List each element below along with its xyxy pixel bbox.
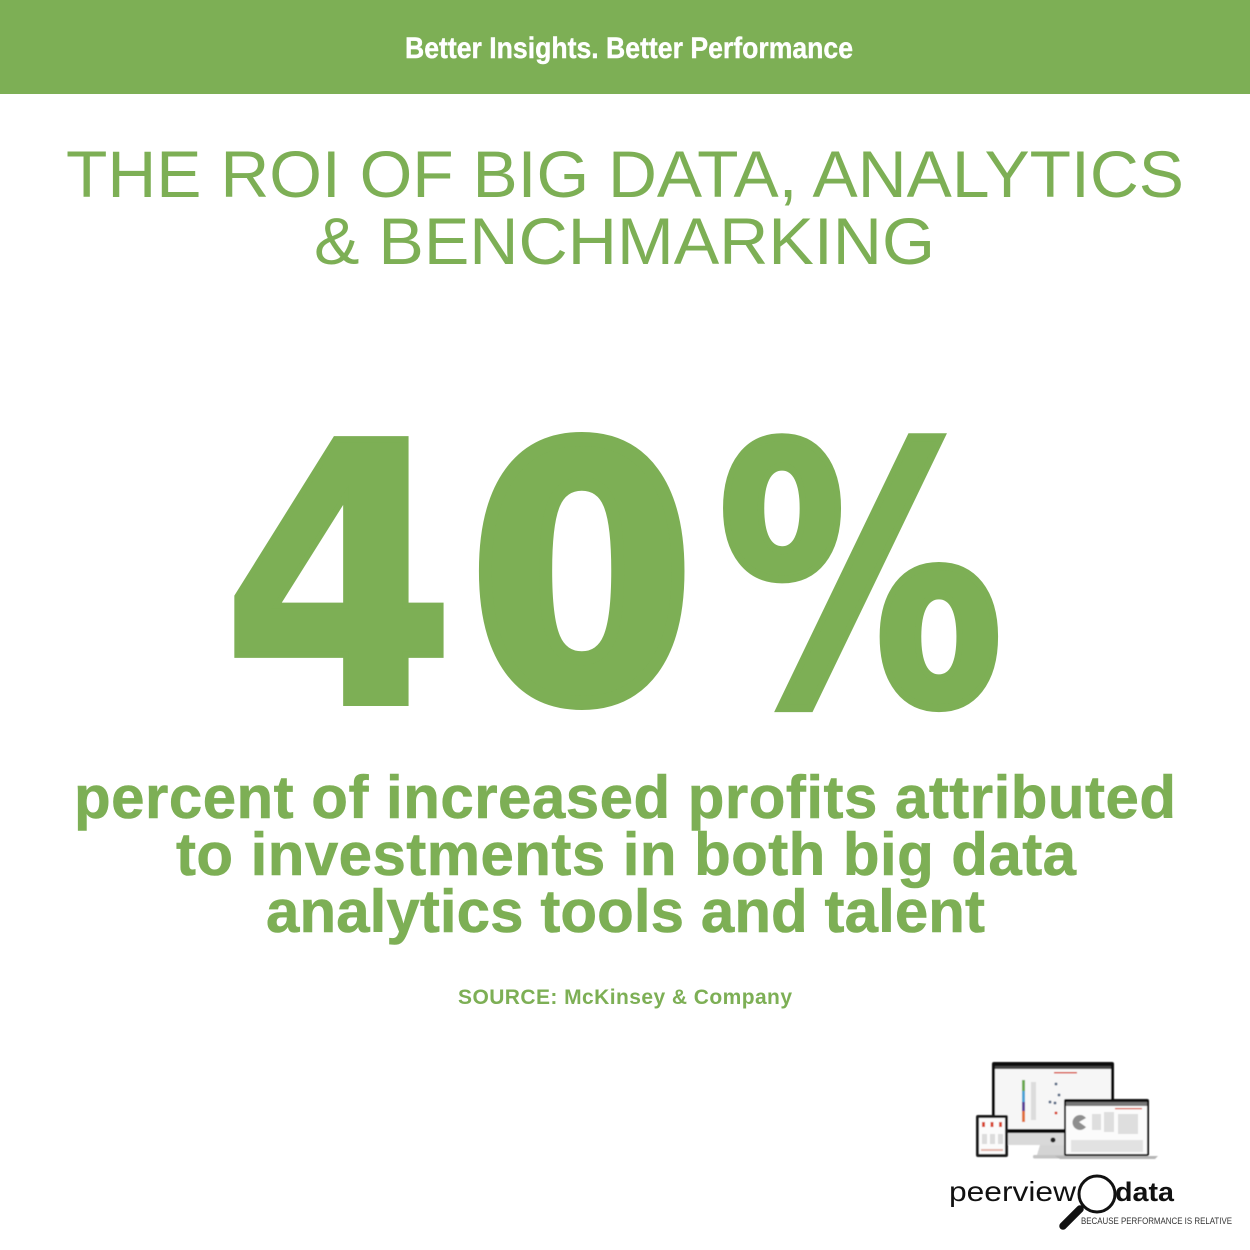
device mockups bbox=[976, 1062, 1158, 1159]
big statistic: 40% bbox=[222, 369, 1004, 789]
statistic description: percent of increased profits attributed bbox=[74, 764, 1176, 831]
statistic description: to investments in both big data bbox=[176, 821, 1077, 888]
title: THE ROI OF BIG DATA, ANALYTICS bbox=[66, 137, 1184, 211]
big statistic: 40%: % bbox=[717, 372, 1004, 788]
logo word: data: data bbox=[1115, 1177, 1175, 1207]
header banner bbox=[0, 0, 1250, 94]
icon: tablet bbox=[976, 1115, 1008, 1157]
big statistic: 40%: 4 bbox=[222, 369, 456, 789]
banner text: Better Insights. Better Performance bbox=[405, 32, 853, 65]
title bbox=[66, 137, 1184, 278]
big statistic: 40%: 0 bbox=[470, 375, 693, 781]
title: & BENCHMARKING bbox=[314, 204, 935, 278]
logo: peerview data bbox=[949, 1176, 1232, 1227]
icon: laptop bbox=[1055, 1099, 1158, 1159]
icon: magnifying glass bbox=[1063, 1176, 1115, 1226]
logo word: peerview: peerview bbox=[949, 1176, 1077, 1207]
source: SOURCE: McKinsey & Company bbox=[458, 986, 792, 1009]
icon: desktop monitor bbox=[992, 1062, 1114, 1158]
statistic description: analytics tools and talent bbox=[266, 878, 985, 945]
statistic description bbox=[74, 764, 1176, 945]
